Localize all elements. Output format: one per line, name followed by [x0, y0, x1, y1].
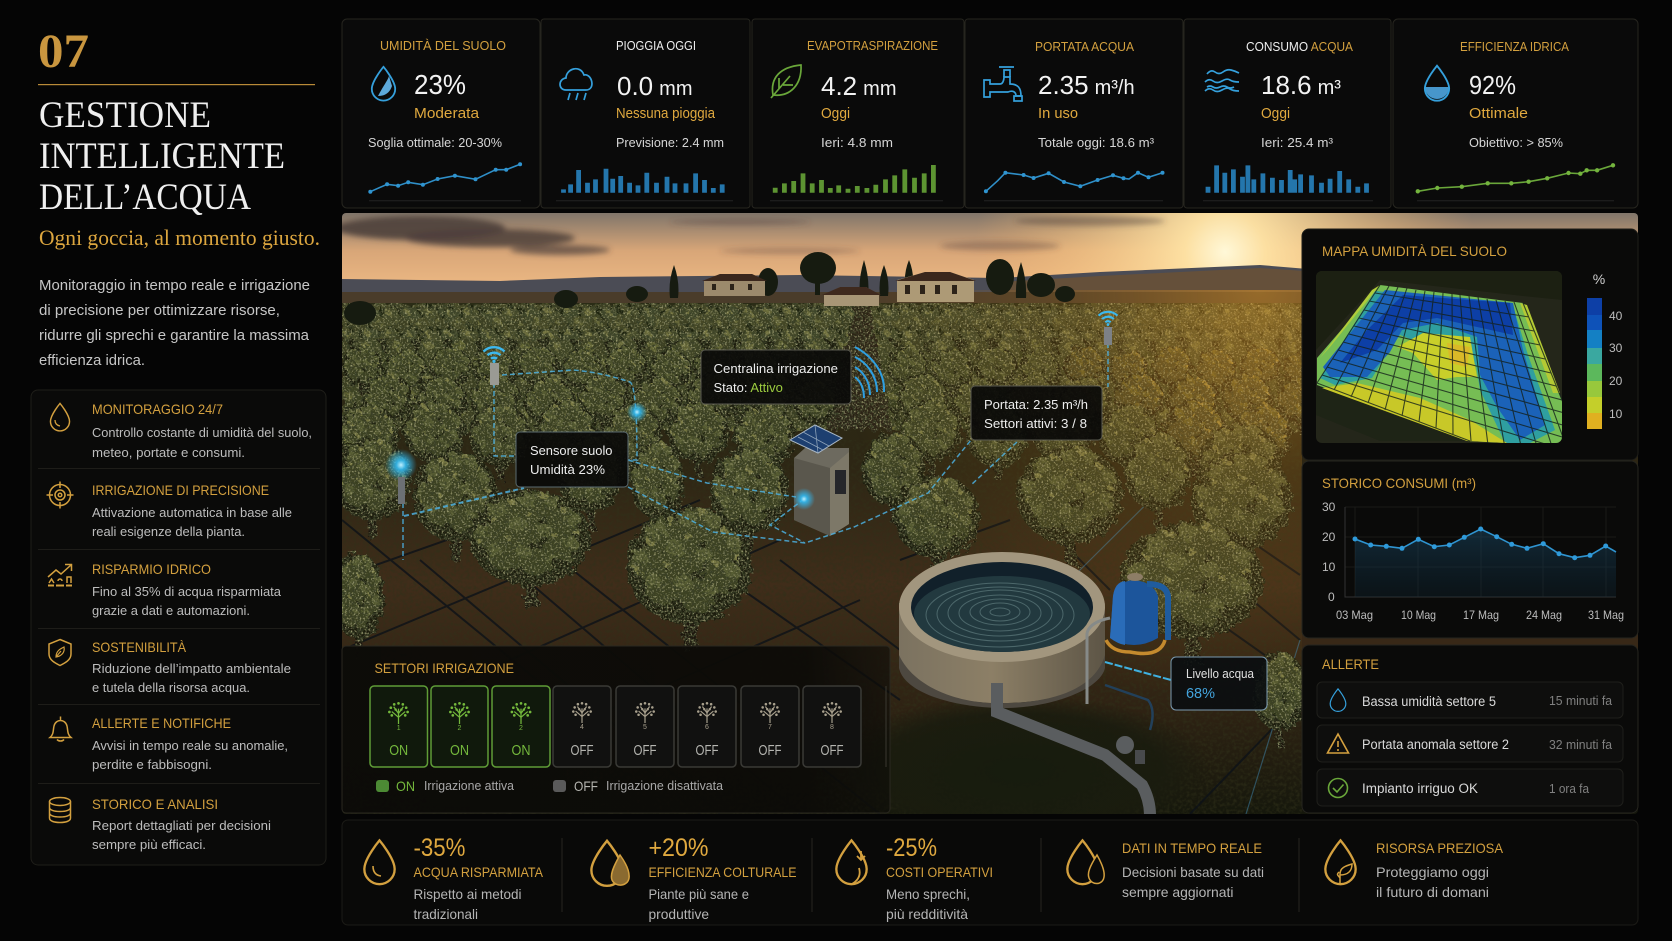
line chart: 10 Mag: [1401, 608, 1436, 622]
panel: KPI pioggia oggi: [541, 19, 750, 208]
feature: risparmio: [48, 561, 282, 618]
icon: rain cloud: [560, 69, 592, 100]
panel: bottom benefits: [342, 820, 1638, 925]
feature: allerte: [50, 715, 288, 772]
callout: portata: Portata: 2.35 m³/h: [984, 397, 1088, 412]
title rule: [38, 84, 315, 85]
feature: monitoraggio: Controllo costante di umidità del suolo,: [92, 425, 312, 440]
alert: portata anomala: Portata anomala settore 2: [1362, 737, 1509, 752]
outlet pipe and valve: [997, 683, 1150, 815]
alert: bassa umidita: [1317, 682, 1623, 718]
sector 3 on: ON: [512, 742, 530, 759]
alert: portata anomala: [1317, 725, 1623, 762]
intro paragraph: ridurre gli sprechi e garantire la massima: [39, 327, 310, 344]
sector 2 on: [431, 686, 488, 767]
sector 4 off: [553, 686, 611, 767]
panel: KPI umidita del suolo: [342, 19, 540, 208]
title: DELL’ACQUA: [39, 177, 251, 218]
benefit: efficienza colturale: +20%: [648, 834, 708, 862]
orchard ground: [342, 303, 1638, 814]
feature: risparmio: grazie a dati e automazioni.: [92, 603, 250, 618]
moisture legend: 20: [1609, 374, 1623, 388]
panel: KPI efficienza idrica: EFFICIENZA IDRICA: [1460, 39, 1569, 54]
feature: allerte: perdite e fabbisogni.: [92, 757, 212, 772]
blue pressure vessel with pipes: [1087, 573, 1171, 730]
title: INTELLIGENTE: [39, 136, 285, 177]
panel: KPI umidita del suolo: UMIDITÀ DEL SUOLO: [380, 38, 506, 53]
panel: KPI efficienza idrica: [1393, 19, 1638, 208]
feature: sostenibilita: SOSTENIBILITÀ: [92, 639, 187, 655]
legend: OFF: [574, 778, 598, 794]
panel: KPI efficienza idrica: Obiettivo: > 85%: [1469, 135, 1563, 150]
wireless arcs from controller: [855, 347, 884, 398]
panel: KPI umidita del suolo: 23%: [414, 69, 466, 100]
intro paragraph: [39, 277, 310, 369]
benefit: risorsa preziosa: Proteggiamo oggi: [1376, 864, 1489, 880]
title: GESTIONE: [39, 95, 211, 136]
feature: sostenibilita: e tutela della risorsa acqua.: [92, 680, 250, 695]
sector 3 on: 2: [519, 725, 523, 732]
alert: bassa umidita: Bassa umidità settore 5: [1362, 694, 1496, 709]
callout: livello acqua: Livello acqua: [1186, 667, 1254, 681]
alert: impianto ok: [1317, 769, 1623, 806]
icon: soil moisture drop: [372, 67, 395, 101]
sector 5 off: 5: [643, 724, 647, 731]
panel: KPI umidita del suolo: Soglia ottimale: 20-30%: [368, 135, 502, 150]
sector 5 off: [616, 686, 674, 767]
legend: Irrigazione attiva: [424, 779, 514, 793]
moisture legend: 10: [1609, 407, 1623, 421]
sensor: center-left with wifi: [484, 347, 504, 385]
line chart: 10: [1322, 560, 1336, 574]
benefit: dati in tempo reale: DATI IN TEMPO REALE: [1122, 840, 1262, 856]
panel: KPI evapotraspirazione: Ieri: 4.8 mm: [821, 135, 893, 150]
callout: sensore suolo: Sensore suolo: [530, 443, 612, 458]
panel: storico consumi: STORICO CONSUMI (m³): [1322, 475, 1476, 491]
panel: feature list: [31, 390, 326, 865]
sector 7 off: 7: [768, 724, 772, 731]
sector 1 on: [370, 686, 428, 767]
legend: ON: [396, 778, 415, 794]
dashed sensor connections: [403, 327, 1108, 560]
callout: sensore suolo: Umidità 23%: [530, 462, 605, 477]
tagline: Ogni goccia, al momento giusto.: [39, 225, 320, 250]
panel: KPI portata acqua: PORTATA ACQUA: [1035, 39, 1134, 54]
feature: precisione: [46, 482, 292, 539]
benefit: efficienza colturale: EFFICIENZA COLTURALE: [648, 864, 796, 880]
sector 8 off: 8: [830, 724, 834, 731]
benefit: risorsa preziosa: [1325, 840, 1504, 900]
sensor: right with wifi: [1099, 312, 1117, 345]
benefit: costi operativi: [836, 834, 993, 922]
panel: KPI evapotraspirazione: EVAPOTRASPIRAZIONE: [807, 38, 938, 53]
heading: SETTORI IRRIGAZIONE: [374, 660, 514, 676]
benefit: costi operativi: Meno sprechi,: [886, 886, 970, 902]
hero photo scene: olive grove at sunset: [332, 213, 1640, 845]
panel: KPI efficienza idrica: Ottimale: [1469, 105, 1528, 122]
intro paragraph: efficienza idrica.: [39, 352, 145, 369]
panel: KPI consumo acqua: 18.6 m³: [1261, 70, 1341, 100]
benefit: acqua risparmiata: ACQUA RISPARMIATA: [414, 864, 544, 880]
central aisle: [826, 303, 892, 430]
title: [39, 95, 285, 218]
line chart: 24 Mag: [1526, 608, 1562, 622]
olive rows: [332, 303, 1326, 748]
panel: KPI portata acqua: [965, 19, 1183, 208]
line chart: 03 Mag: [1336, 608, 1373, 622]
bar chart: consumption: [1208, 165, 1366, 193]
bar chart: rain: [564, 169, 722, 193]
benefit: efficienza colturale: produttive: [648, 906, 709, 922]
feature: precisione: IRRIGAZIONE DI PRECISIONE: [92, 482, 269, 498]
icon: leaf: [771, 65, 801, 98]
panel: allerte: [1302, 645, 1638, 813]
sector 6 off: OFF: [696, 742, 718, 759]
panel: mappa umidita del suolo: MAPPA UMIDITÀ DEL SUOLO: [1322, 243, 1507, 259]
feature: precisione: reali esigenze della pianta.: [92, 524, 245, 539]
benefit: efficienza colturale: [591, 834, 796, 922]
feature: storico: [50, 796, 271, 852]
feature: monitoraggio: meteo, portate e consumi.: [92, 445, 245, 460]
callout: portata: Settori attivi: 3 / 8: [984, 416, 1087, 431]
sector 4 off: OFF: [570, 742, 594, 759]
sector 3 on: [492, 686, 550, 767]
sector 7 off: [741, 686, 799, 767]
distant hills: [342, 265, 1302, 292]
panel: KPI consumo acqua: Oggi: [1261, 105, 1290, 122]
panel: KPI consumo acqua: Ieri: 25.4 m³: [1261, 135, 1334, 150]
callout: sensore suolo: [516, 432, 628, 487]
panel: KPI pioggia oggi: Nessuna pioggia: [616, 105, 716, 122]
benefit: dati in tempo reale: sempre aggiornati: [1122, 884, 1234, 900]
legend: [376, 778, 723, 794]
panel: KPI efficienza idrica: 92%: [1469, 70, 1516, 100]
benefit: risorsa preziosa: il futuro di domani: [1376, 884, 1489, 900]
sparkline: humidity: [368, 162, 522, 201]
dark grass around tank: [830, 695, 1210, 845]
panel: KPI evapotraspirazione: 4.2 mm: [821, 71, 896, 101]
feature: allerte: Avvisi in tempo reale su anomalie,: [92, 738, 288, 753]
benefit: dati in tempo reale: [1067, 840, 1264, 900]
panel: KPI pioggia oggi: 0.0 mm: [617, 71, 692, 101]
benefit: costi operativi: COSTI OPERATIVI: [886, 864, 993, 880]
section number: 07: [38, 25, 89, 78]
feature: sostenibilita: Riduzione dell’impatto ambientale: [92, 661, 291, 676]
sector 8 off: [803, 686, 861, 767]
sector 1 on: ON: [389, 742, 408, 759]
feature: storico: STORICO E ANALISI: [92, 796, 218, 812]
line chart: 31 Mag: [1588, 608, 1624, 622]
line chart: 17 Mag: [1463, 608, 1499, 622]
alert: impianto ok: 1 ora fa: [1549, 782, 1589, 796]
panel: KPI portata acqua: 2.35 m³/h: [1038, 70, 1135, 100]
feature: monitoraggio: MONITORAGGIO 24/7: [92, 401, 223, 417]
sensor: left: [385, 449, 417, 504]
benefit: acqua risparmiata: Rispetto ai metodi: [414, 886, 522, 902]
panel: mappa umidita del suolo: [1302, 229, 1638, 470]
panel: KPI portata acqua: In uso: [1038, 105, 1078, 122]
moisture legend: 40: [1609, 309, 1623, 323]
intro paragraph: Monitoraggio in tempo reale e irrigazione: [39, 277, 310, 294]
callout: centralina: [701, 350, 851, 404]
moisture legend: 30: [1609, 341, 1623, 355]
sector 2 on: ON: [450, 742, 469, 759]
alert: bassa umidita: 15 minuti fa: [1549, 694, 1612, 708]
panel: KPI portata acqua: Totale oggi: 18.6 m³: [1038, 135, 1155, 150]
sector 1 on: 1: [397, 725, 401, 732]
sky: [342, 213, 1638, 281]
panel: KPI umidita del suolo: Moderata: [414, 105, 480, 122]
benefit: acqua risparmiata: -35%: [414, 834, 466, 862]
alert: portata anomala: 32 minuti fa: [1549, 738, 1612, 752]
panel: KPI evapotraspirazione: [752, 19, 964, 208]
sector 2 on: 2: [458, 725, 462, 732]
benefit: costi operativi: -25%: [886, 834, 937, 862]
feature: allerte: ALLERTE E NOTIFICHE: [92, 715, 231, 731]
sector 7 off: OFF: [758, 742, 782, 759]
line chart: 30: [1322, 500, 1336, 514]
benefit: efficienza colturale: Piante più sane e: [648, 886, 749, 902]
feature: precisione: Attivazione automatica in base alle: [92, 505, 292, 520]
sparkline: flow: [984, 171, 1164, 201]
line chart: [1322, 500, 1624, 622]
callout: portata: [971, 386, 1102, 440]
irrigation tubing grid: [342, 500, 1300, 814]
feature: storico: Report dettagliati per decisioni: [92, 818, 271, 833]
panel: KPI consumo acqua: [1184, 19, 1391, 208]
panel: left intro: [38, 25, 320, 369]
soil grain: [356, 566, 1302, 814]
icon: water waves: [1205, 70, 1239, 92]
benefit: acqua risparmiata: [364, 834, 544, 922]
icon: water tap: [984, 67, 1022, 101]
feature: storico: sempre più efficaci.: [92, 837, 206, 852]
sector 8 off: OFF: [820, 742, 844, 759]
sector 4 off: 4: [580, 724, 584, 731]
panel: KPI consumo acqua: CONSUMO ACQUA: [1246, 39, 1353, 54]
glowing nodes: [627, 402, 815, 510]
sparkline: efficiency: [1416, 163, 1615, 201]
panel: settori irrigazione: [342, 646, 890, 813]
sector 6 off: [678, 686, 736, 767]
panel: KPI evapotraspirazione: Oggi: [821, 105, 850, 122]
sector 5 off: OFF: [634, 742, 656, 759]
soil moisture heat map: [1316, 271, 1562, 443]
benefit: acqua risparmiata: tradizionali: [414, 906, 478, 922]
panel: KPI pioggia oggi: PIOGGIA OGGI: [616, 38, 696, 53]
intro paragraph: di precisione per ottimizzare risorse,: [39, 302, 280, 319]
feature: sostenibilita: [49, 639, 291, 695]
sector 6 off: 6: [705, 724, 709, 731]
stone water tank: [899, 552, 1105, 708]
icon: efficiency drop: [1425, 66, 1449, 101]
benefit: dati in tempo reale: Decisioni basate su dati: [1122, 864, 1264, 880]
line chart: 0: [1328, 590, 1335, 604]
panel: allerte: ALLERTE: [1322, 656, 1379, 672]
callout: livello acqua: [1171, 657, 1267, 710]
feature: monitoraggio: [50, 401, 312, 460]
moisture legend: [1587, 271, 1623, 429]
panel: KPI pioggia oggi: Previsione: 2.4 mm: [616, 135, 724, 150]
alert: impianto ok: Impianto irriguo OK: [1362, 781, 1478, 796]
panel: storico consumi: [1302, 461, 1638, 638]
callout: livello acqua: 68%: [1186, 685, 1215, 702]
bar chart: evapotranspiration: [775, 165, 933, 193]
line chart: 20: [1322, 530, 1336, 544]
feature: risparmio: RISPARMIO IDRICO: [92, 561, 211, 577]
pump controller cabinet with solar panel: [790, 425, 849, 536]
feature: risparmio: Fino al 35% di acqua risparmiata: [92, 584, 282, 599]
legend: Irrigazione disattivata: [606, 779, 723, 793]
benefit: risorsa preziosa: RISORSA PREZIOSA: [1376, 840, 1504, 856]
moisture legend: %: [1593, 271, 1605, 287]
callout: centralina: Centralina irrigazione: [714, 361, 838, 376]
warm sunset light overlay: [898, 290, 1302, 658]
farmhouses and cypresses: [344, 252, 1075, 325]
benefit: costi operativi: più redditività: [886, 906, 968, 922]
callout: centralina: Stato: Attivo: [714, 380, 783, 395]
